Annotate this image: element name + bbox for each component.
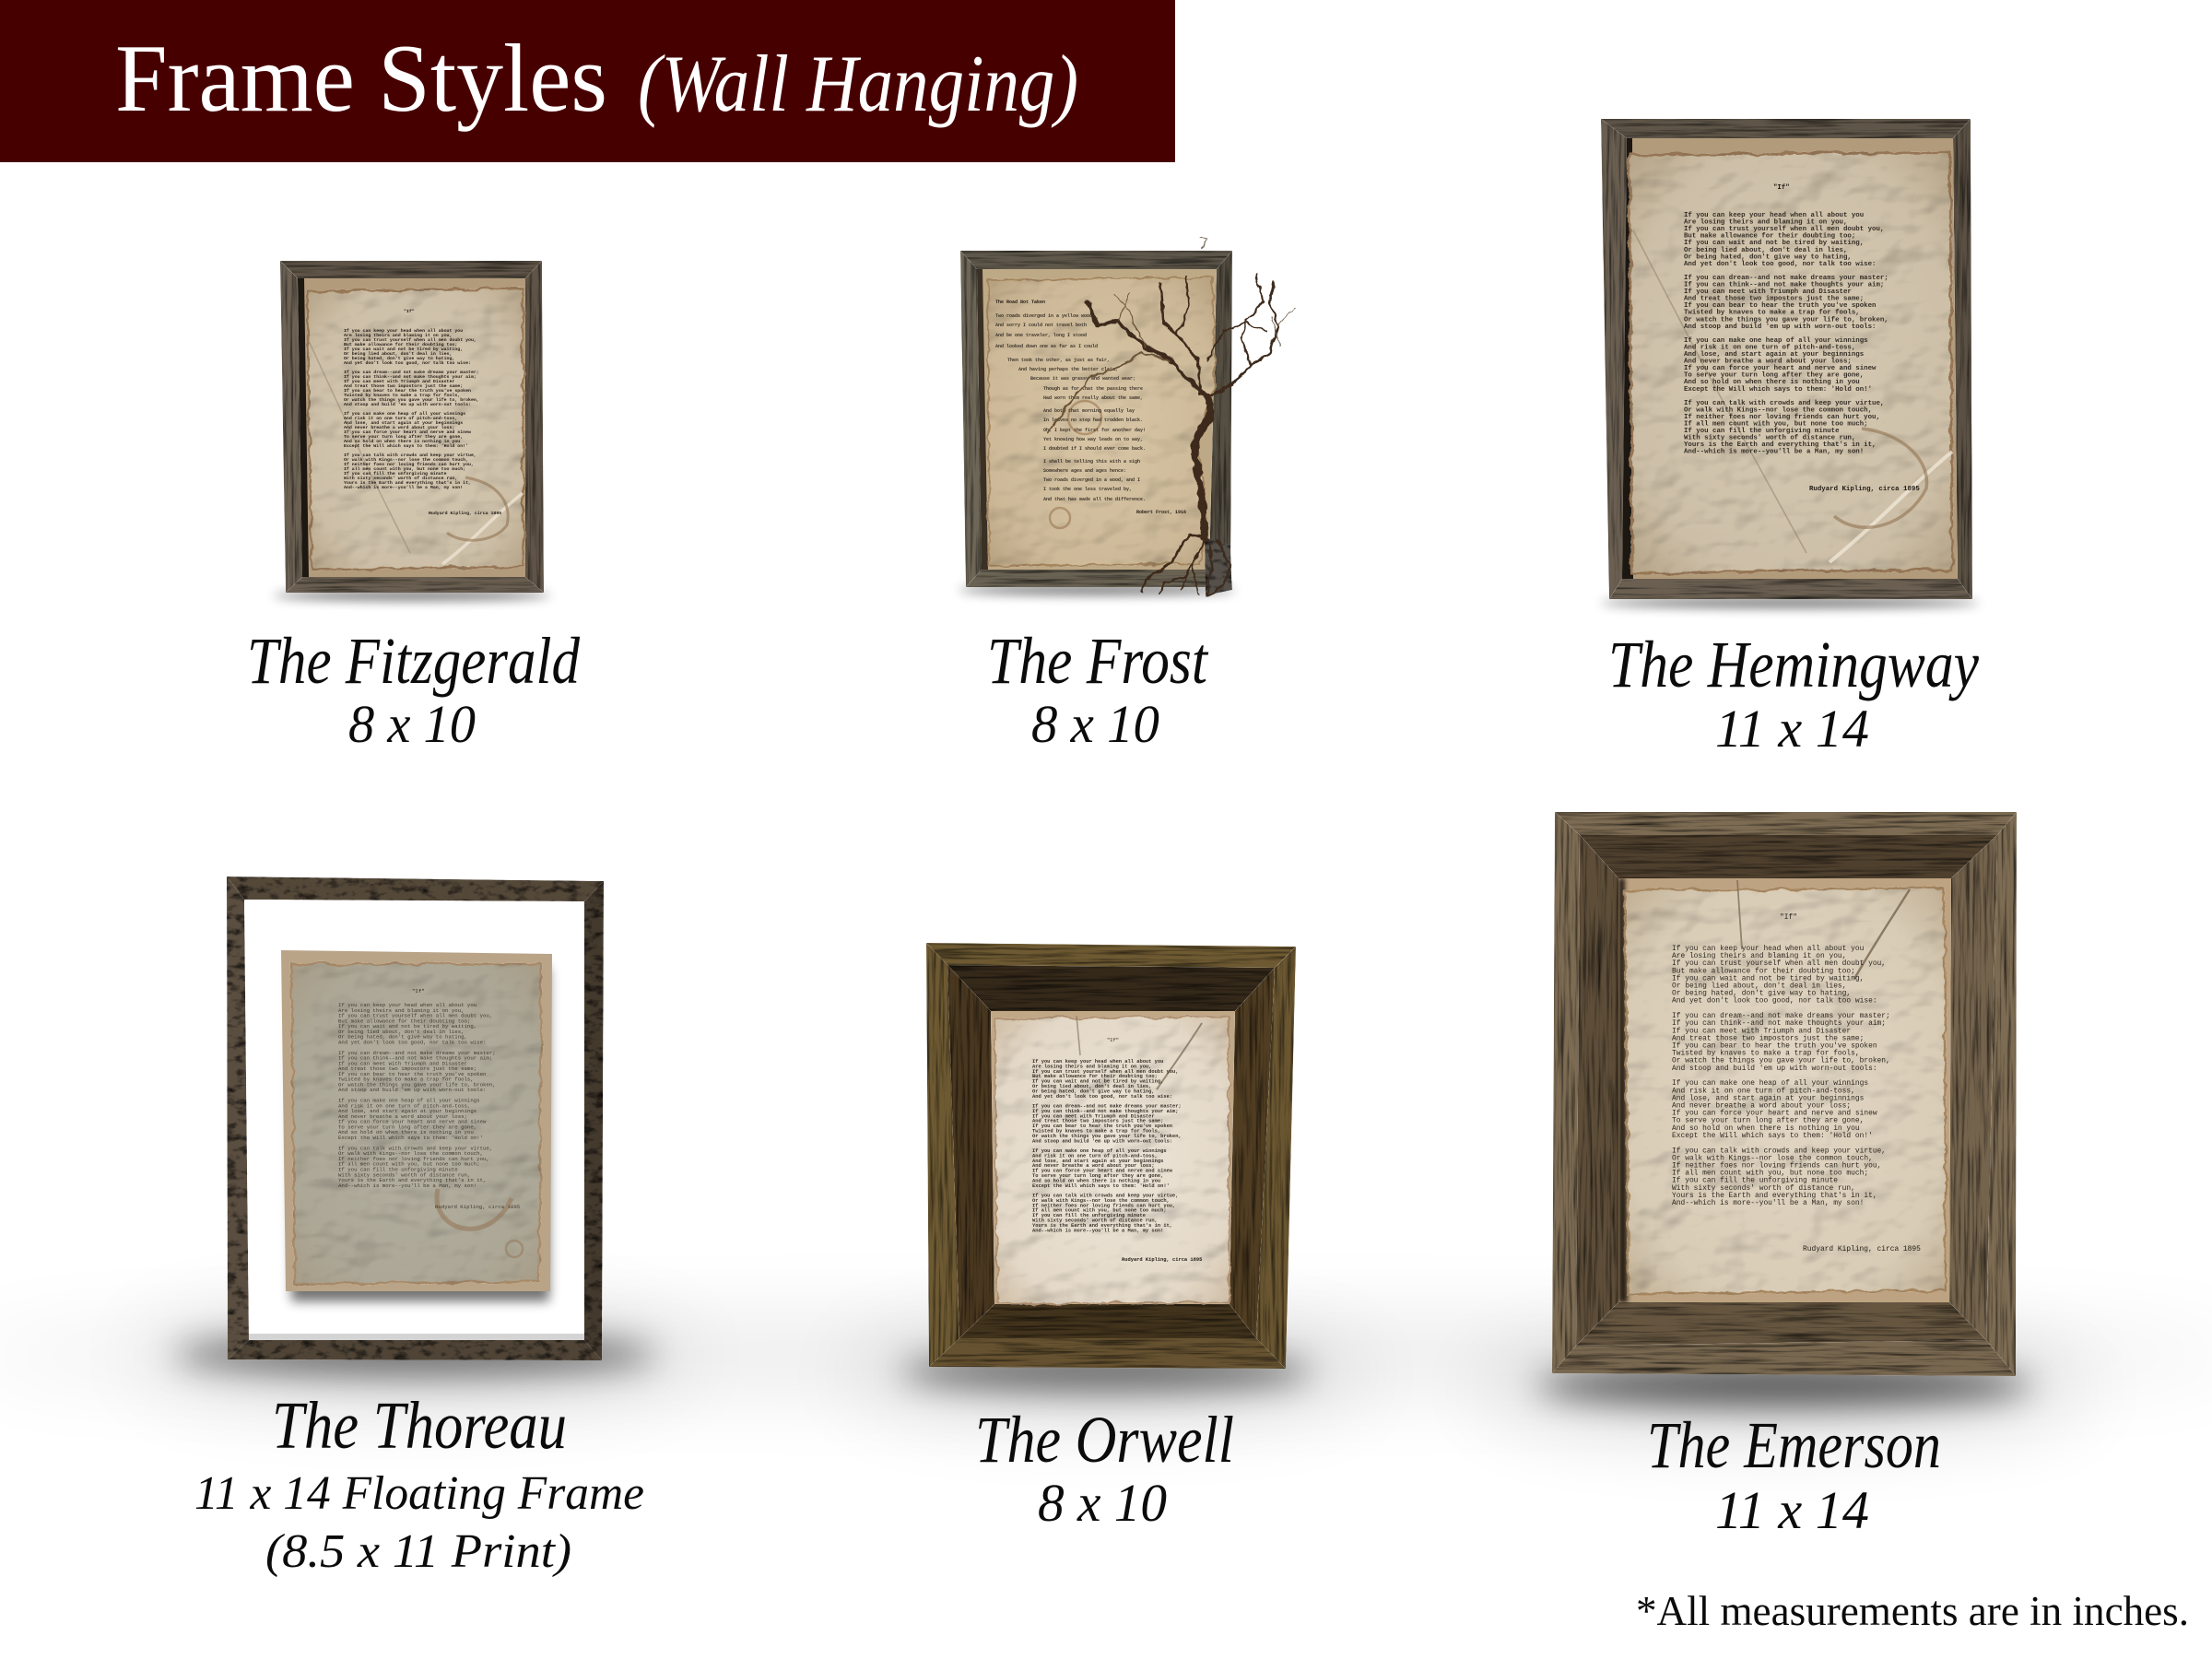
poem text: If you can fill the unforgiving minute — [1684, 428, 1840, 435]
paper shadow — [291, 968, 549, 1301]
caption: The Orwell: 8 x 10 — [1038, 1473, 1167, 1533]
poem text: With sixty seconds' worth of distance run, — [1032, 1218, 1158, 1224]
poem text: I shall be telling this with a sigh — [1043, 459, 1140, 465]
poem text: Are losing theirs and blaming it on you, — [344, 333, 452, 338]
poem text: Yours is the Earth and everything that's in it, — [1672, 1192, 1877, 1200]
poem text: Or being lied about, don't deal in lies, — [1672, 982, 1846, 990]
poem text: Twisted by knaves to make a trap for fools, — [344, 393, 460, 398]
poem text: But make allowance for their doubting too; — [344, 342, 457, 347]
lower panel shade — [249, 1334, 584, 1340]
poem text: If you can talk with crowds and keep your virtue, — [1672, 1147, 1886, 1155]
poem text: If you can trust yourself when all men doubt you, — [338, 1013, 492, 1019]
poem text: To serve your turn long after they are gone, — [1032, 1173, 1163, 1179]
poem text: If you can think--and not make thoughts your aim; — [1032, 1109, 1179, 1114]
poem text: If you can make one heap of all your winnings — [1672, 1079, 1868, 1088]
caption: The Frost: The Frost — [987, 624, 1209, 698]
poem text: If all men count with you, but none too much; — [344, 466, 465, 472]
poem text: With sixty seconds' worth of distance run, — [338, 1171, 470, 1178]
poem text: Though as for that the passing there — [1043, 386, 1143, 392]
poem text: And stoop and build 'em up with worn-out tools: — [344, 402, 471, 407]
poem text: Twisted by knaves to make a trap for fools, — [1672, 1050, 1860, 1058]
frame: The Orwell — [926, 943, 1296, 1369]
poem title: "If" — [412, 988, 425, 994]
poem text: Or being hated, don't give way to hating, — [344, 356, 454, 361]
caption: The Hemingway — [1608, 628, 1979, 759]
poem text: And treat those two impostors just the same; — [1684, 296, 1864, 303]
poem text: But make allowance for their doubting too; — [1672, 967, 1855, 975]
poem text: If you can meet with Triumph and Disaster — [1684, 288, 1852, 296]
poem text: If you can fill the unforgiving minute — [338, 1167, 458, 1172]
poem text: If you can make one heap of all your winnings — [1032, 1148, 1167, 1154]
paper — [994, 1017, 1230, 1304]
poem text: If you can dream--and not make dreams your master; — [1684, 275, 1888, 282]
poem text: If you can force your heart and nerve and sinew — [1684, 365, 1877, 372]
frame: The Thoreau — [227, 877, 604, 1360]
poem text: And be one traveler, long I stood — [995, 333, 1087, 338]
subtitle: (Wall Hanging) — [638, 40, 1078, 129]
caption: The Orwell — [975, 1403, 1234, 1533]
poem text: If you can meet with Triumph and Disaster — [344, 379, 454, 384]
caption: The Thoreau: The Thoreau — [272, 1388, 567, 1463]
poem text: If you can force your heart and nerve and sinew — [344, 429, 471, 435]
title banner — [0, 0, 1175, 162]
poem text: And both that morning equally lay — [1043, 408, 1135, 414]
poem text: If you can talk with crowds and keep your virtue, — [1684, 400, 1884, 407]
poem text: I took the one less traveled by, — [1043, 487, 1132, 492]
poem text: Or being lied about, don't deal in lies, — [344, 351, 452, 357]
poem text: And never breathe a word about your loss; — [1032, 1163, 1155, 1169]
poem text: Are losing theirs and blaming it on you, — [1684, 219, 1847, 227]
poem text: Yours is the Earth and everything that's in it, — [1684, 441, 1876, 449]
poem text: If you can dream--and not make dreams your master; — [344, 370, 479, 375]
frame: The Frost — [960, 238, 1295, 596]
caption: The Hemingway: The Hemingway — [1608, 628, 1979, 701]
poem text: And lose, and start again at your beginnings — [1684, 351, 1864, 359]
poem text: To serve your turn long after they are gone, — [344, 434, 463, 440]
poem text: Yours is the Earth and everything that's in it, — [338, 1177, 486, 1183]
poem text: Somewhere ages and ages hence: — [1043, 468, 1126, 474]
poem text: And lose, and start again at your beginnings — [1672, 1094, 1865, 1102]
poem text: If you can bear to hear the truth you've spoken — [1032, 1124, 1172, 1129]
caption: The Fitzgerald: 8 x 10 — [348, 694, 476, 754]
coffee ring stains — [437, 1189, 523, 1257]
wood frame — [227, 877, 604, 1360]
poem text: Are losing theirs and blaming it on you, — [1032, 1064, 1151, 1069]
poem text: And yet don't look too good, nor talk too wise: — [1032, 1094, 1172, 1100]
poem text: And never breathe a word about your loss; — [1684, 359, 1852, 366]
poem text: And yet don't look too good, nor talk too wise: — [1684, 261, 1876, 268]
poem text: Or being lied about, don't deal in lies, — [338, 1029, 465, 1035]
poem text: And so hold on when there is nothing in you — [338, 1129, 474, 1135]
poem text: Yours is the Earth and everything that's in it, — [344, 480, 471, 486]
poem text: If you can think--and not make thoughts your aim; — [344, 374, 477, 380]
poem text: Except the Will which says to them: 'Hold on!' — [1684, 386, 1872, 394]
poem text: Or watch the things you gave your life to, broken, — [1684, 316, 1888, 324]
poem text: And looked down one as far as I could — [995, 344, 1098, 349]
poem text: I doubted if I should ever come back. — [1043, 446, 1146, 452]
poem text: And stoop and build 'em up with worn-out tools: — [1684, 324, 1876, 331]
wood frame — [926, 943, 1296, 1369]
poem text: If you can talk with crowds and keep your virtue, — [344, 453, 477, 458]
caption: The Hemingway: 11 x 14 — [1715, 699, 1869, 759]
poem text: But make allowance for their doubting too; — [338, 1018, 470, 1024]
poem text: Then took the other, as just as fair, — [1007, 358, 1110, 363]
caption: The Fitzgerald: The Fitzgerald — [247, 624, 581, 698]
poem text: And treat those two impostors just the same; — [338, 1065, 477, 1072]
poem text: And so hold on when there is nothing in you — [1032, 1178, 1160, 1183]
poem title: "If" — [1780, 913, 1797, 922]
caption: The Frost — [987, 624, 1209, 754]
poem text: Or walk with Kings--nor lose the common touch, — [344, 457, 468, 463]
creases and stain — [1633, 230, 1952, 562]
poem text: If you can talk with crowds and keep your virtue, — [1032, 1193, 1179, 1198]
poem text: Except the Will which says to them: 'Hold on!' — [1032, 1183, 1170, 1189]
frame: The Emerson — [1552, 812, 2017, 1376]
poem text: With sixty seconds' worth of distance run, — [344, 476, 457, 481]
poem text: If you can meet with Triumph and Disaster — [338, 1060, 467, 1066]
poem text: With sixty seconds' worth of distance run, — [1684, 435, 1855, 442]
poem text: If you can trust yourself when all men doubt you, — [1684, 226, 1884, 233]
poem text: If you can make one heap of all your winnings — [344, 411, 465, 417]
poem signature: Robert Frost, 1916 — [1136, 510, 1186, 515]
poem text: Or watch the things you gave your life to, broken, — [338, 1081, 496, 1088]
poem text: Or being hated, don't give way to hating, — [1672, 990, 1851, 998]
poem text: And that has made all the difference. — [1043, 497, 1146, 502]
poem text: And never breathe a word about your loss; — [344, 425, 454, 430]
poem text: And yet don't look too good, nor talk too wise: — [344, 360, 471, 366]
poem text: In leaves no step had trodden black. — [1043, 418, 1143, 423]
poem text: If you can force your heart and nerve and sinew — [338, 1119, 487, 1125]
poem text: If neither foes nor loving friends can hurt you, — [344, 462, 474, 467]
caption: The Emerson: The Emerson — [1647, 1408, 1941, 1482]
poem text: Except the Will which says to them: 'Hold on!' — [338, 1135, 483, 1141]
poem text: If neither foes nor loving friends can hurt you, — [1672, 1161, 1881, 1171]
creases — [1737, 880, 1910, 979]
poem text: Yours is the Earth and everything that's in it, — [1032, 1223, 1172, 1229]
poem text: And lose, and start again at your beginnings — [338, 1108, 477, 1114]
poem text: If all men count with you, but none too much; — [338, 1161, 480, 1168]
poem text: If you can bear to hear the truth you've spoken — [1684, 302, 1876, 310]
poem text: And sorry I could not travel both — [995, 323, 1087, 328]
frame: The Hemingway — [1601, 119, 1972, 599]
poem text: But make allowance for their doubting too; — [1684, 233, 1855, 241]
poem text: If you can wait and not be tired by waiting, — [338, 1023, 477, 1030]
poem text: Two roads diverged in a wood, and I — [1043, 477, 1140, 483]
poem text: If you can fill the unforgiving minute — [344, 471, 447, 477]
poem text: Or being hated, don't give way to hating, — [1684, 253, 1852, 261]
poem text: And--which is more--you'll be a Man, my son! — [1684, 449, 1864, 456]
frame: The Fitzgerald — [280, 261, 544, 593]
poem text: Or being hated, don't give way to hating, — [338, 1034, 467, 1041]
paper — [988, 277, 1215, 566]
wood frame — [1552, 812, 2017, 1376]
caption: The Frost: 8 x 10 — [1031, 694, 1159, 754]
poem text: If you can keep your head when all about you — [344, 328, 463, 334]
poem text: If you can fill the unforgiving minute — [1032, 1213, 1146, 1218]
poem text: Yet knowing how way leads on to way, — [1043, 437, 1143, 442]
poem text: And risk it on one turn of pitch-and-toss, — [344, 416, 457, 421]
poem text: And so hold on when there is nothing in you — [1684, 379, 1860, 386]
wood frame — [280, 261, 544, 593]
poem text: To serve your turn long after they are gone, — [338, 1124, 477, 1130]
poem text: And never breathe a word about your loss; — [1672, 1102, 1851, 1110]
poem text: Or walk with Kings--nor lose the common touch, — [338, 1150, 483, 1157]
poem text: If you can keep your head when all about you — [1684, 212, 1864, 219]
caption: The Emerson — [1647, 1408, 1941, 1540]
poem text: If you can bear to hear the truth you've spoken — [1672, 1041, 1877, 1051]
poem text: And stoop and build 'em up with worn-out tools: — [338, 1087, 486, 1093]
poem text: And yet don't look too good, nor talk too wise: — [338, 1039, 486, 1045]
paper — [281, 950, 552, 1291]
poem text: And risk it on one turn of pitch-and-toss, — [338, 1102, 470, 1109]
poem text: If you can think--and not make thoughts your aim; — [338, 1055, 492, 1062]
paper — [1630, 152, 1952, 573]
poem title: "If" — [404, 309, 415, 314]
poem text: If you can wait and not be tired by waiting, — [344, 347, 463, 352]
poem title: "If" — [1773, 184, 1790, 192]
wood frame — [1601, 119, 1972, 599]
poem text: If you can keep your head when all about you — [1672, 945, 1865, 953]
poem text: If all men count with you, but none too much; — [1032, 1208, 1167, 1214]
poem text: If you can keep your head when all about you — [338, 1002, 477, 1008]
poem text: If you can dream--and not make dreams your master; — [338, 1050, 496, 1056]
poem text: Or watch the things you gave your life to, broken, — [344, 397, 479, 403]
caption: The Thoreau: 11 x 14 Floating Frame — [194, 1467, 644, 1520]
paper — [1625, 888, 1946, 1294]
moss block at tree base — [1205, 537, 1232, 595]
poem text: Except the Will which says to them: 'Hold on!' — [1672, 1132, 1873, 1140]
poem text: Except the Will which says to them: 'Hold on!' — [344, 443, 468, 449]
poem text: With sixty seconds' worth of distance run, — [1672, 1184, 1855, 1193]
tree illustration — [1048, 238, 1295, 596]
poem text: Or walk with Kings--nor lose the common touch, — [1032, 1198, 1170, 1204]
poem text: If you can make one heap of all your winnings — [1684, 337, 1868, 345]
paper — [307, 288, 524, 570]
poem signature: Rudyard Kipling, circa 1895 — [1809, 486, 1920, 493]
poem text: If you can wait and not be tired by waiting, — [1672, 974, 1864, 982]
poem text: Are losing theirs and blaming it on you, — [1672, 952, 1846, 960]
floor shadow band — [0, 585, 2212, 1428]
poem text: If you can meet with Triumph and Disaster — [1032, 1113, 1155, 1119]
poem text: And stoop and build 'em up with worn-out tools: — [1672, 1065, 1877, 1073]
poem text: Or being hated, don't give way to hating, — [1032, 1088, 1155, 1094]
poem text: And treat those two impostors just the same; — [344, 383, 463, 389]
poem text: Are losing theirs and blaming it on you, — [338, 1007, 465, 1014]
poem text: To serve your turn long after they are gone, — [1672, 1117, 1864, 1125]
poem text: If you can wait and not be tired by waiting, — [1032, 1079, 1163, 1085]
poem text: If all men count with you, but none too much; — [1672, 1170, 1868, 1178]
poem signature: Rudyard Kipling, circa 1895 — [1122, 1257, 1202, 1263]
poem text: If neither foes nor loving friends can hurt you, — [1032, 1203, 1175, 1208]
poem text: But make allowance for their doubting too; — [1032, 1074, 1158, 1079]
poem text: If neither foes nor loving friends can hurt you, — [1684, 414, 1880, 421]
poem text: And risk it on one turn of pitch-and-toss, — [1684, 344, 1855, 351]
poem text: If you can keep your head when all about you — [1032, 1059, 1163, 1065]
poem text: If you can think--and not make thoughts your aim; — [1672, 1019, 1886, 1028]
poem text: And so hold on when there is nothing in you — [344, 439, 460, 444]
poem title: "If" — [1107, 1038, 1119, 1043]
poem text: And treat those two impostors just the same; — [1032, 1119, 1163, 1124]
poem text: If you can bear to hear the truth you've spoken — [344, 388, 471, 394]
caption: The Emerson: 11 x 14 — [1715, 1480, 1869, 1540]
poem title: The Road Not Taken — [995, 300, 1045, 305]
poem text: And so hold on when there is nothing in you — [1672, 1124, 1860, 1133]
caption: The Thoreau: (8.5 x 11 Print) — [265, 1525, 571, 1578]
poem text: And--which is more--you'll be a Man, my son! — [338, 1182, 477, 1189]
poem text: If you can wait and not be tired by waiting, — [1684, 240, 1864, 247]
poem text: If you can dream--and not make dreams your master; — [1672, 1012, 1890, 1020]
poem text: And yet don't look too good, nor talk too wise: — [1672, 997, 1877, 1006]
poem text: And stoop and build 'em up with worn-out tools: — [1032, 1138, 1172, 1144]
poem text: If you can talk with crowds and keep your virtue, — [338, 1145, 492, 1151]
poem text: If neither foes nor loving friends can hurt you, — [338, 1156, 489, 1162]
poem text: If you can force your heart and nerve and sinew — [1672, 1110, 1877, 1118]
poem text: Or being lied about, don't deal in lies, — [1684, 247, 1847, 254]
poem text: If you can force your heart and nerve and sinew — [1032, 1169, 1173, 1174]
caption: The Orwell: The Orwell — [975, 1403, 1234, 1477]
white float panel — [244, 900, 584, 1340]
wood frame — [960, 251, 1232, 587]
poem text: And lose, and start again at your beginnings — [344, 420, 463, 426]
poem signature: Rudyard Kipling, circa 1895 — [435, 1204, 521, 1210]
poem text: Or watch the things you gave your life to, broken, — [1032, 1134, 1182, 1139]
poem text: Or walk with Kings--nor lose the common touch, — [1684, 406, 1872, 414]
caption: The Fitzgerald — [247, 624, 581, 754]
poem text: And lose, and start again at your beginnings — [1032, 1159, 1163, 1164]
poem text: Because it was grassy and wanted wear; — [1030, 376, 1135, 382]
poem text: If you can trust yourself when all men doubt you, — [344, 337, 477, 343]
poem text: Twisted by knaves to make a trap for fools, — [1684, 310, 1860, 317]
poem text: Or being lied about, don't deal in lies, — [1032, 1084, 1151, 1089]
poem text: If all men count with you, but none too much; — [1684, 421, 1868, 429]
poem text: Twisted by knaves to make a trap for fools, — [1032, 1128, 1160, 1134]
poem text: To serve your turn long after they are gone, — [1684, 372, 1864, 380]
poem text: Oh, I kept the first for another day! — [1043, 428, 1146, 433]
poem text: If you can meet with Triumph and Disaster — [1672, 1027, 1851, 1035]
poem text: And never breathe a word about your loss; — [338, 1113, 467, 1120]
creases — [1077, 1016, 1202, 1089]
poem text: And--which is more--you'll be a Man, my son! — [1672, 1199, 1864, 1207]
poem text: And risk it on one turn of pitch-and-toss, — [1032, 1153, 1158, 1159]
poem text: And risk it on one turn of pitch-and-toss, — [1672, 1087, 1855, 1095]
creases and stain — [309, 341, 523, 564]
poem text: And having perhaps the better claim, — [1018, 367, 1118, 372]
poem text: If you can bear to hear the truth you've spoken — [338, 1071, 486, 1077]
poem text: If you can dream--and not make dreams your master; — [1032, 1104, 1182, 1110]
poem signature: Rudyard Kipling, circa 1895 — [429, 511, 501, 516]
poem text: And--which is more--you'll be a Man, my son! — [1032, 1228, 1163, 1233]
poem signature: Rudyard Kipling, circa 1895 — [1803, 1245, 1921, 1253]
poem text: If you can think--and not make thoughts your aim; — [1684, 282, 1884, 289]
poem text: And treat those two impostors just the same; — [1672, 1034, 1864, 1042]
poem text: If you can trust yourself when all men doubt you, — [1672, 959, 1886, 968]
poem text: And--which is more--you'll be a Man, my son! — [344, 485, 463, 490]
title: Frame Styles — [115, 24, 607, 132]
caption: The Thoreau — [194, 1388, 644, 1578]
poem text: Two roads diverged in a yellow wood, — [995, 313, 1095, 319]
stain rings — [1050, 401, 1101, 528]
poem text: If you can make one heap of all your winnings — [338, 1098, 480, 1104]
poem text: If you can fill the unforgiving minute — [1672, 1177, 1838, 1185]
poem text: Or walk with Kings--nor lose the common touch, — [1672, 1154, 1873, 1162]
poem text: Or watch the things you gave your life to, broken, — [1672, 1057, 1890, 1065]
footnote: *All measurements are in inches. — [1636, 1588, 2189, 1634]
poem text: If you can trust yourself when all men doubt you, — [1032, 1069, 1179, 1075]
poem text: Twisted by knaves to make a trap for fools, — [338, 1077, 474, 1083]
poem text: Had worn them really about the same, — [1043, 395, 1143, 401]
